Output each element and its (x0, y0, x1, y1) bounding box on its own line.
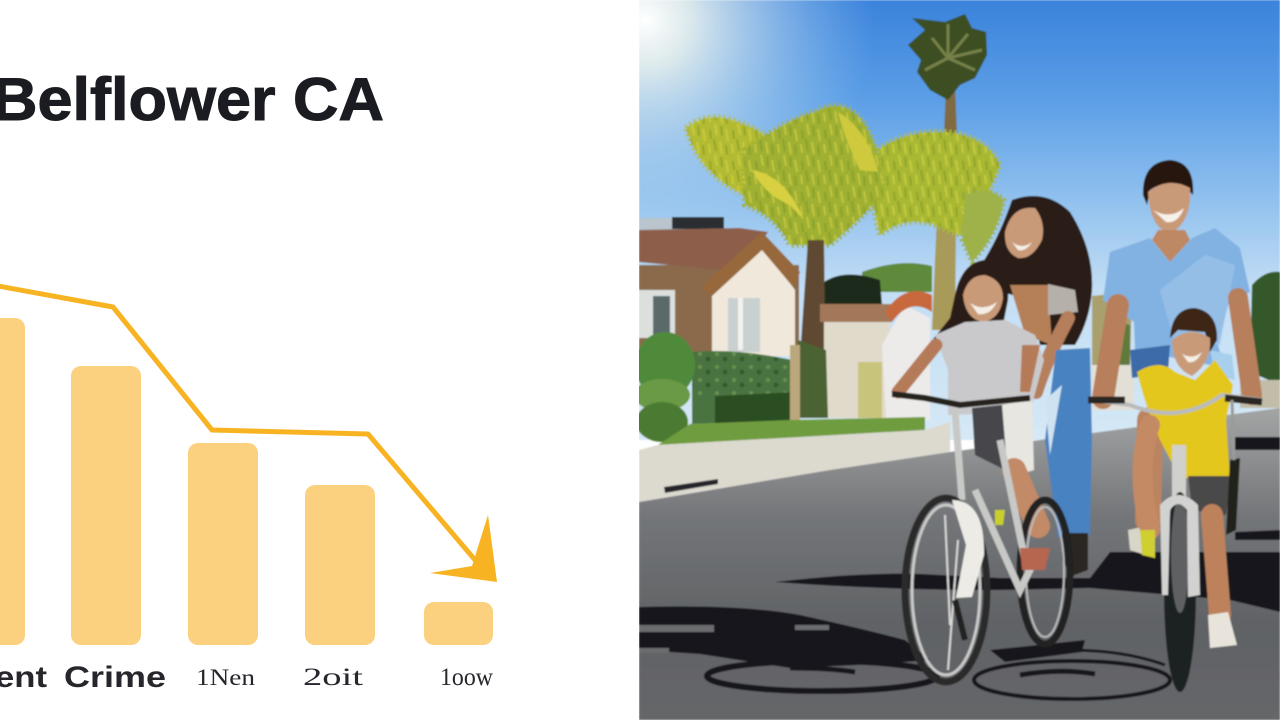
bar labels: Crime (64, 661, 166, 694)
sky (639, 0, 1280, 440)
boy in yellow shirt (1137, 308, 1240, 648)
bar labels (0, 661, 493, 694)
photo: family cycling on a sunny street (634, 0, 1280, 720)
shadow highlights (639, 625, 829, 653)
willow palm crowns (682, 102, 1008, 350)
bar labels: 2oit (303, 664, 363, 691)
road shadows (639, 437, 1280, 668)
boy's bicycle (1088, 395, 1262, 692)
hedges and bushes (634, 332, 828, 443)
house (639, 228, 800, 356)
man (1103, 160, 1252, 558)
title: Belflower CA (0, 66, 384, 133)
girl's bicycle (892, 394, 1070, 682)
bar labels: 1Nen (196, 665, 256, 690)
panel: chart background (0, 0, 639, 720)
girl on bicycle (898, 260, 1044, 526)
arrow: declining trend line (0, 286, 497, 582)
background trees and distant scenery (640, 217, 1280, 410)
bicycle wheel shadows (707, 650, 1170, 699)
sidewalk (639, 422, 950, 502)
road (639, 408, 1280, 720)
lawn (658, 417, 925, 445)
bar chart (0, 318, 493, 645)
tall palm tree (908, 14, 987, 330)
garage (820, 291, 932, 420)
bar labels: 1oow (440, 664, 493, 691)
woman (983, 196, 1092, 576)
